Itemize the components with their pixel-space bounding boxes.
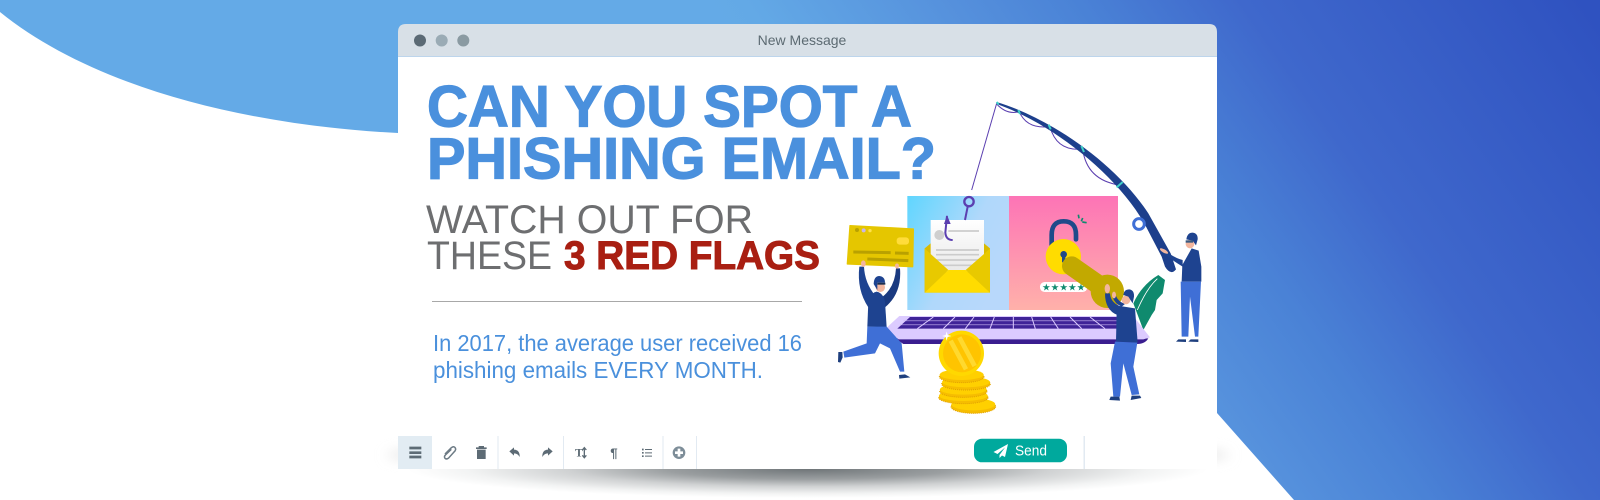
window title: New Message	[758, 32, 847, 48]
icon: paperclip	[444, 447, 456, 459]
icon: paragraph: ¶	[610, 445, 618, 460]
figure: thief holding card	[838, 260, 910, 379]
icon: add	[673, 446, 685, 459]
illustration: phishing scene	[838, 102, 1201, 413]
big coin	[939, 331, 984, 376]
toolbar icons	[409, 445, 685, 460]
icon: list	[642, 449, 652, 457]
heading: can you spot a phishing email	[427, 74, 936, 192]
icon: redo	[542, 447, 553, 457]
fishing rod	[972, 102, 1176, 272]
coin stack	[939, 369, 996, 413]
window body	[398, 57, 1217, 469]
subheading: watch out for 3 red flags: 3 RED FLAGS	[564, 234, 820, 278]
subheading: watch out for 3 red flags: WATCH OUT FOR	[426, 198, 753, 242]
icon: key	[1072, 266, 1124, 308]
figure: thief holding key	[1105, 284, 1141, 401]
window drop shadow	[398, 469, 1218, 500]
laptop screen: email side	[907, 196, 1009, 310]
subheading: watch out for 3 red flags: THESE	[427, 234, 552, 278]
icon: leaf	[1133, 275, 1165, 330]
statistic text: phishing emails EVERY MONTH.	[433, 357, 763, 383]
divider	[432, 301, 802, 302]
statistic text: In 2017, the average user received 16	[433, 330, 802, 356]
window side haze	[386, 442, 1230, 468]
send label: Send	[1015, 443, 1047, 460]
icon: padlock with password: ★★★★★	[1042, 283, 1086, 294]
laptop screen: password side	[1009, 196, 1118, 310]
statistic text	[433, 330, 802, 383]
toolbar separators	[498, 436, 1085, 469]
panel: email window	[398, 24, 1217, 469]
icon: credit card	[847, 226, 913, 267]
icon: undo	[509, 447, 520, 457]
laptop keyboard	[886, 316, 1150, 344]
icon: text size: T	[575, 446, 583, 460]
icon: menu	[409, 447, 421, 458]
window control dots	[414, 34, 469, 46]
figure: thief holding fishing rod	[1159, 233, 1201, 342]
heading: can you spot a phishing email: PHISHING EMAIL?	[427, 126, 936, 192]
subheading: watch out for 3 red flags	[426, 198, 820, 278]
toolbar active button	[398, 436, 432, 469]
icon: paper plane	[994, 444, 1008, 458]
icon: trash	[476, 446, 487, 459]
icon: padlock with password	[1040, 215, 1087, 294]
window title bar	[398, 24, 1217, 57]
icon: envelope with phishing hook	[925, 197, 990, 293]
send button	[974, 439, 1067, 462]
heading: can you spot a phishing email: CAN YOU SPOT A	[427, 74, 912, 140]
toolbar	[398, 436, 1085, 469]
